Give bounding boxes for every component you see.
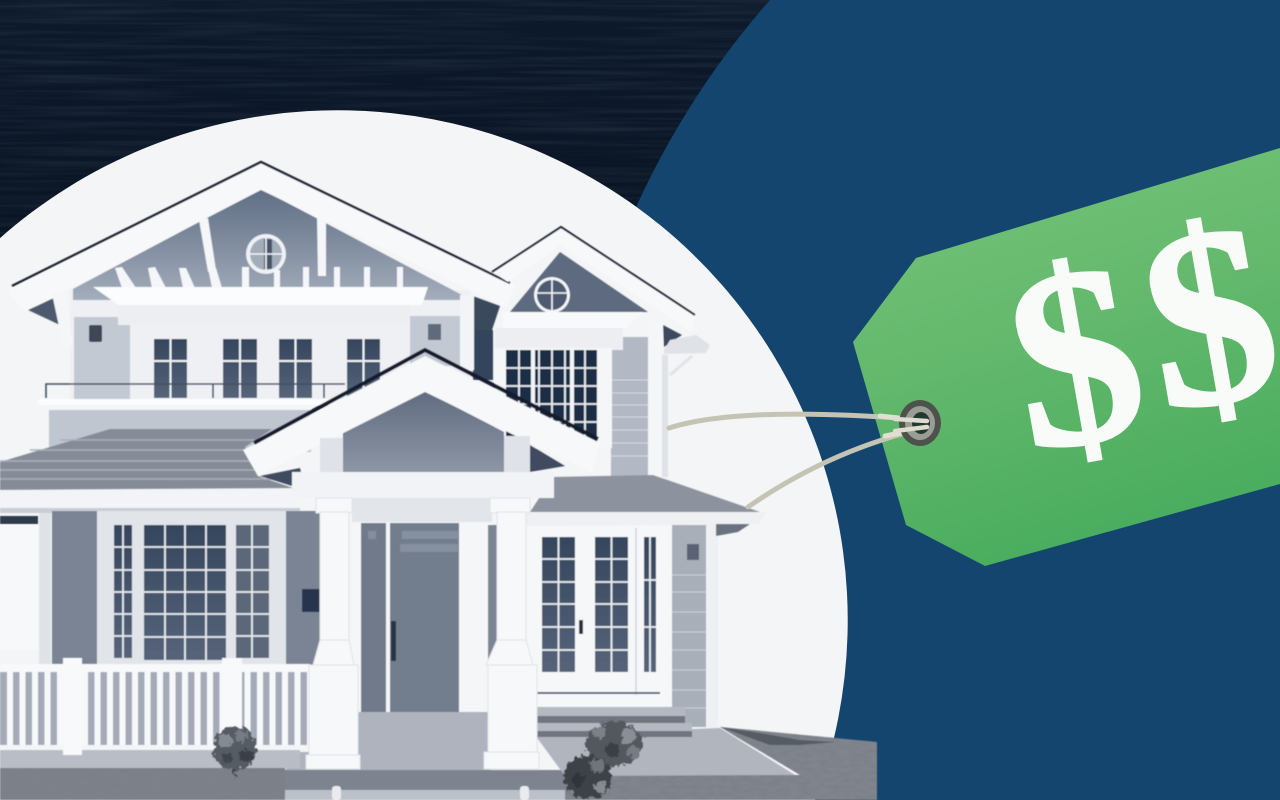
right siding lines <box>672 575 706 708</box>
shrub left <box>213 726 257 779</box>
siding lines <box>611 380 649 456</box>
right wall lamp <box>687 544 699 560</box>
door left sidelight <box>361 523 386 712</box>
railing top rail <box>0 664 310 672</box>
porch floor <box>283 712 490 772</box>
side overhang <box>664 335 710 354</box>
price tag <box>669 148 1280 566</box>
right siding <box>672 525 706 727</box>
dormer pergola <box>503 312 643 328</box>
left garden <box>0 767 285 800</box>
left upper wall <box>74 317 130 399</box>
left gable post <box>52 290 73 345</box>
door lock <box>391 621 396 661</box>
left soffit strip <box>0 508 300 513</box>
outer post <box>39 513 51 668</box>
dollar signs <box>989 167 1280 506</box>
left eave <box>0 488 305 508</box>
dormer header <box>495 328 623 350</box>
band top trim <box>49 405 311 410</box>
lawn right <box>565 727 877 800</box>
right lower roof <box>530 475 760 512</box>
upper right gray wall <box>410 316 460 366</box>
door glass <box>368 535 458 548</box>
front walkway <box>280 790 565 800</box>
dormer window <box>495 348 612 448</box>
dark beam at far left <box>0 516 38 524</box>
left shadow under front gable <box>260 468 305 490</box>
shrub right <box>564 722 643 799</box>
gutter <box>716 524 750 536</box>
grommet <box>895 400 941 446</box>
dark gap between gables <box>470 295 500 340</box>
balcony railing <box>46 384 345 398</box>
door panel <box>390 523 459 712</box>
wall lamp upper left <box>89 325 102 342</box>
wall plaque <box>302 589 320 612</box>
gap wall <box>473 330 493 380</box>
dormer fascia <box>492 228 696 332</box>
right corner board <box>706 524 718 728</box>
railing bottom rail <box>0 745 310 750</box>
dollar signs: $ <box>989 207 1163 506</box>
dormer roof edge <box>492 227 695 315</box>
corner board <box>648 322 663 478</box>
right porch column <box>484 498 539 769</box>
main roof edge <box>12 162 510 286</box>
door side stripe <box>488 525 497 665</box>
upper right white wall <box>460 295 474 370</box>
upper windows <box>154 339 380 398</box>
front door wall <box>352 522 492 714</box>
tag body <box>853 148 1280 566</box>
patio <box>535 728 795 776</box>
front gable fascia <box>243 356 600 476</box>
door steps <box>533 707 692 737</box>
front gable siding <box>343 391 504 472</box>
pergola beam <box>93 287 428 306</box>
round attic window <box>246 234 286 274</box>
window trim <box>97 511 286 671</box>
header under pergola <box>118 305 410 325</box>
bay window <box>114 525 269 660</box>
dormer gable siding <box>510 252 648 312</box>
roof shingle lines <box>0 440 275 479</box>
dark soffit corner <box>663 325 682 347</box>
right dormer siding <box>611 337 649 477</box>
corbels <box>320 436 530 472</box>
french door wall <box>525 526 673 706</box>
house <box>0 162 877 800</box>
front roof edge <box>254 350 598 443</box>
main gable siding <box>73 189 462 300</box>
blue circle background <box>600 0 1280 800</box>
left ledge <box>0 750 300 768</box>
planting bed <box>720 727 835 745</box>
french door glass <box>530 528 660 695</box>
right eave <box>525 512 768 526</box>
left lower roof <box>0 429 302 491</box>
main roof fascia <box>8 163 516 312</box>
railing balusters <box>7 672 310 745</box>
railing posts <box>63 658 242 755</box>
lower left wall <box>52 511 322 671</box>
path lamps <box>332 786 529 800</box>
band below balcony <box>49 410 311 452</box>
white interior at far left <box>0 525 39 650</box>
porch step face <box>283 770 565 790</box>
upper storey wall <box>70 290 470 405</box>
dormer round window <box>534 277 570 313</box>
front gable shadow <box>530 445 565 472</box>
white circle backdrop <box>0 110 848 800</box>
balcony floor <box>38 399 343 405</box>
railing backing <box>0 672 310 745</box>
porch beam <box>292 472 554 498</box>
beam under <box>352 498 492 530</box>
left porch column <box>306 498 360 769</box>
lamp fixture <box>428 324 441 340</box>
side bracket <box>670 356 692 375</box>
dark background streak texture <box>0 0 800 130</box>
downpipe <box>662 355 668 477</box>
gable brackets <box>115 218 403 288</box>
string loop <box>669 414 926 507</box>
left soffit <box>28 296 60 325</box>
